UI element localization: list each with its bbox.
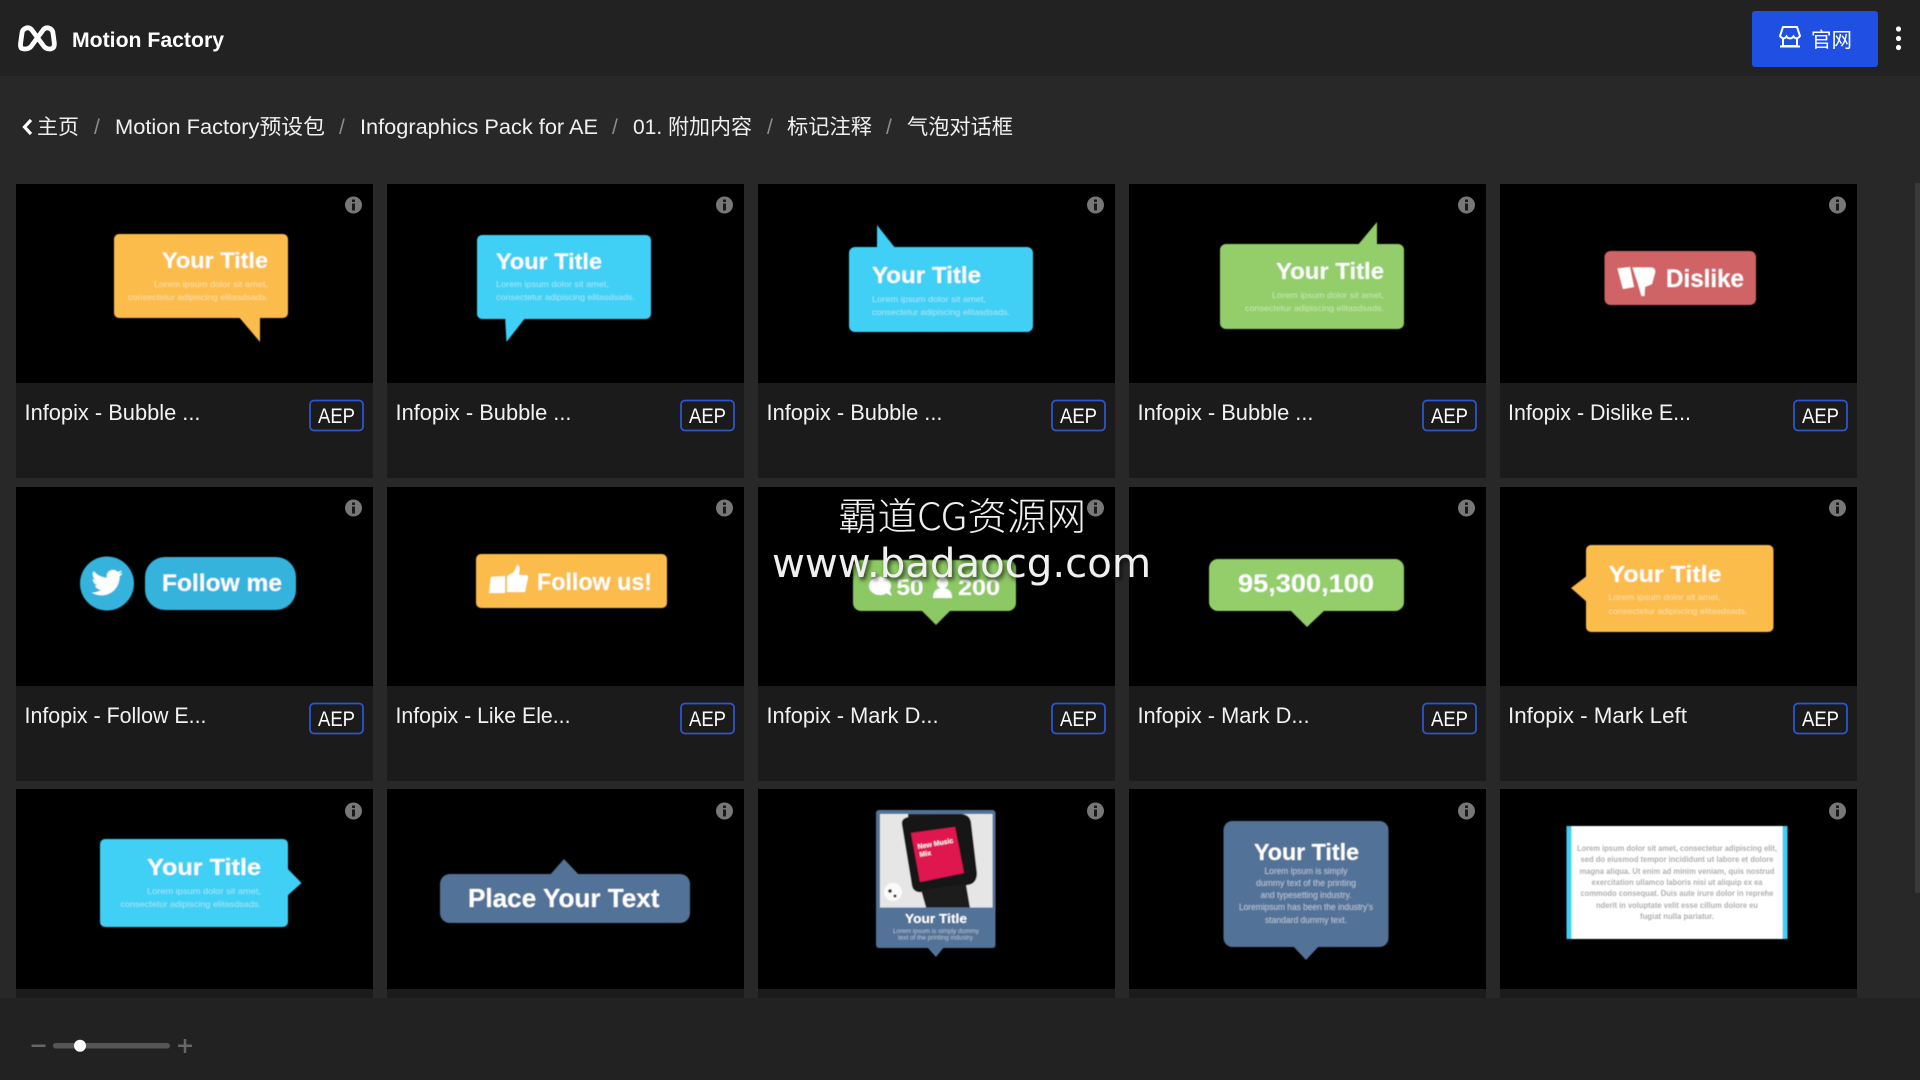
badge: AEP <box>1052 704 1105 734</box>
icon: thumb down <box>1618 267 1655 296</box>
bubble: slate text: Lorem ipsum is simply <box>1264 866 1348 877</box>
badge: AEP: AEP <box>318 708 355 731</box>
slider knob <box>74 1040 86 1052</box>
bubble: orange bottom right tail: Lorem ipsum dolor sit amet, <box>154 279 268 289</box>
badge: AEP: AEP <box>689 405 726 428</box>
breadcrumb: 主页 <box>37 116 79 139</box>
badge: AEP <box>1052 400 1105 430</box>
icon: thumb up <box>489 565 528 593</box>
bubble: cyan bottom left tail: consectetur adipiscing elitasdsads. <box>496 292 635 302</box>
bubble: slate text: dummy text of the printing <box>1256 878 1356 889</box>
bubble: slate photo <box>876 810 996 957</box>
scrollbar <box>1915 183 1920 893</box>
button: dislike <box>1604 251 1756 305</box>
badge: AEP: AEP <box>689 708 726 731</box>
icon: info <box>1458 802 1475 820</box>
bubble: green stats <box>853 560 1016 625</box>
badge: AEP: AEP <box>1060 405 1097 428</box>
card name: Infopix - Dislike E... <box>1508 400 1691 425</box>
badge: AEP <box>1794 400 1847 430</box>
card name: Infopix - Mark Left <box>1508 703 1687 728</box>
icon: more menu <box>1896 26 1901 50</box>
bubble: green top right tail: Lorem ipsum dolor sit amet, <box>1272 290 1384 300</box>
button: follow us: Follow us! <box>537 569 652 596</box>
icon: info <box>1829 196 1846 214</box>
slider track <box>53 1043 170 1048</box>
breadcrumb: / <box>767 116 773 139</box>
text box: white with cyan edges: Lorem ipsum dolor sit amet, consectetur adipiscing elit, <box>1577 844 1777 853</box>
icon: info <box>345 196 362 214</box>
panel: card photo callout <box>758 789 1115 998</box>
bubble: slate text: standard dummy text. <box>1265 915 1347 926</box>
icon: comment <box>869 577 892 596</box>
bubble: cyan right arrow <box>100 839 302 927</box>
icon: info <box>716 196 733 214</box>
breadcrumb: / <box>94 116 100 139</box>
bubble: green top right tail: consectetur adipiscing elitasdsads. <box>1245 303 1384 313</box>
image: smart watch: New Music <box>917 838 954 851</box>
bubble: cyan top left tail: Lorem ipsum dolor sit amet, <box>872 294 986 304</box>
card name: Infopix - Bubble ... <box>766 400 942 425</box>
bubble: slate photo: Lorem ipsum is simply dummy <box>893 928 980 935</box>
icon: minus <box>32 1044 46 1047</box>
icon: Motion Factory logo <box>20 28 54 49</box>
icon: store <box>1780 27 1800 46</box>
button: official site: 官网 <box>1811 29 1852 52</box>
breadcrumb: 标记注释 <box>787 116 872 139</box>
bubble: green top right tail <box>1220 222 1404 329</box>
panel: card Dislike <box>1500 184 1857 478</box>
panel: card Like <box>387 487 744 781</box>
badge: AEP <box>1423 704 1476 734</box>
bubble: slate top tail <box>440 859 690 923</box>
badge: AEP <box>310 400 363 430</box>
footer bar with zoom slider <box>0 998 1920 1080</box>
panel: card Mark Right <box>16 789 373 998</box>
icon: info <box>345 500 362 516</box>
badge: AEP: AEP <box>1802 708 1839 731</box>
bubble: cyan bottom left tail: Lorem ipsum dolor sit amet, <box>496 279 609 289</box>
bubble: slate text: and typesetting industry. <box>1260 890 1352 901</box>
bubble: orange left arrow: Your Title <box>1608 561 1722 587</box>
card name: Infopix - Follow E... <box>24 703 206 728</box>
icon: info <box>1458 196 1475 214</box>
panel: card Bubble green <box>1129 184 1486 478</box>
bubble: green top right tail: Your Title <box>1276 258 1384 284</box>
icon: info <box>1829 500 1846 516</box>
panel: card Mark D number <box>1129 487 1486 781</box>
text box: white with cyan edges: exercitation ullamco laboris nisi ut aliquip ex ea <box>1592 878 1763 887</box>
badge: AEP <box>310 704 363 734</box>
bubble: slate top tail: Place Your Text <box>468 883 660 913</box>
bubble: orange bottom right tail <box>114 234 288 342</box>
breadcrumb: / <box>339 116 345 139</box>
breadcrumb <box>24 116 1013 139</box>
text box: white with cyan edges: magna aliqua. Ut enim ad minim veniam, quis nostrud <box>1580 867 1775 876</box>
button: official site <box>1752 11 1878 67</box>
bubble: green stats: 50 <box>896 575 924 600</box>
breadcrumb: 01. 附加内容 <box>633 116 752 139</box>
text box: white with cyan edges: sed do eiusmod tempor incididunt ut labore et dolore <box>1580 855 1774 864</box>
panel: card Bubble orange <box>16 184 373 478</box>
card name: Infopix - Mark D... <box>1138 703 1310 728</box>
bubble: slate photo: text of the printing industry. <box>898 934 974 942</box>
icon: info <box>716 500 733 516</box>
watermark <box>772 486 1151 587</box>
panel: card Follow <box>16 487 373 781</box>
panel: card Mark Left <box>1500 487 1857 781</box>
bubble: slate text <box>1224 821 1388 960</box>
card name: Infopix - Mark D... <box>766 703 938 728</box>
icon: info <box>1087 500 1104 516</box>
bubble: cyan top left tail: Your Title <box>872 262 981 288</box>
text box: white with cyan edges: commodo consequat. Duis aute irure dolor in reprehe <box>1580 889 1774 898</box>
bubble: green stats: 200 <box>958 575 1000 600</box>
bubble: cyan top left tail <box>849 225 1033 332</box>
bubble: slate text: Your Title <box>1254 839 1359 865</box>
bubble: cyan right arrow: consectetur adipiscing elitasdsads. <box>120 899 261 909</box>
icon: plus <box>178 1039 192 1053</box>
panel: card Bubble cyan bottom <box>387 184 744 478</box>
panel: card slate text <box>1129 789 1486 998</box>
panel: card Place Your Text <box>387 789 744 998</box>
bubble: green number <box>1209 559 1404 627</box>
badge: AEP: AEP <box>1431 708 1468 731</box>
watermark: www.badaocg.com <box>772 541 1151 587</box>
card name: Infopix - Like Ele... <box>396 703 570 728</box>
text box: white with cyan edges <box>1566 826 1788 939</box>
bubble: cyan bottom left tail <box>477 235 651 342</box>
image: smart watch: Mix <box>919 850 932 859</box>
bubble: orange bottom right tail: consectetur adipiscing elitasdsads. <box>128 292 268 302</box>
badge: AEP: AEP <box>1060 708 1097 731</box>
bubble: orange left arrow <box>1571 545 1774 632</box>
breadcrumb: / <box>886 116 892 139</box>
text box: white with cyan edges: fugiat nulla pariatur. <box>1640 912 1714 921</box>
icon: info <box>345 802 362 820</box>
bubble: cyan right arrow: Your Title <box>147 854 261 880</box>
panel: card Mark D stats <box>758 487 1115 781</box>
bubble: cyan right arrow: Lorem ipsum dolor sit amet, <box>147 886 261 896</box>
card name: Infopix - Bubble ... <box>396 400 572 425</box>
watermark: 霸道CG资源网 <box>838 486 1086 541</box>
icon: info <box>1458 500 1475 516</box>
icon: info <box>716 802 733 820</box>
badge: AEP <box>1423 400 1476 430</box>
breadcrumb: Infographics Pack for AE <box>360 116 598 139</box>
bubble: cyan top left tail: consectetur adipiscing elitasdsads. <box>872 307 1010 317</box>
bubble: orange left arrow: Lorem ipsum dolor sit amet, <box>1608 592 1720 602</box>
panel: card white text box <box>1500 789 1857 998</box>
badge: AEP <box>681 400 734 430</box>
bubble: orange bottom right tail: Your Title <box>162 248 268 273</box>
button: twitter follow me: Follow me <box>162 570 282 597</box>
card name: Infopix - Bubble ... <box>24 400 200 425</box>
breadcrumb: Motion Factory预设包 <box>115 116 325 139</box>
brand name: Motion Factory <box>72 28 224 52</box>
card name: Infopix - Bubble ... <box>1138 400 1314 425</box>
badge: AEP: AEP <box>318 405 355 428</box>
button: dislike: Dislike <box>1666 265 1744 293</box>
badge: AEP <box>1794 704 1847 734</box>
badge: AEP <box>681 704 734 734</box>
icon: info <box>1087 802 1104 820</box>
icon: info <box>1829 802 1846 820</box>
button: follow us <box>476 554 667 608</box>
icon: person <box>933 578 952 598</box>
icon: twitter bird <box>92 570 123 595</box>
bubble: slate text: Loremipsum has been the industry's <box>1239 902 1373 913</box>
breadcrumb: / <box>612 116 618 139</box>
panel: card Bubble cyan top <box>758 184 1115 478</box>
badge: AEP: AEP <box>1431 405 1468 428</box>
text box: white with cyan edges: nderit in voluptate velit esse cillum dolore eu <box>1596 901 1758 910</box>
badge: AEP: AEP <box>1802 405 1839 428</box>
bubble: cyan bottom left tail: Your Title <box>496 249 602 274</box>
breadcrumb: 气泡对话框 <box>907 116 1013 139</box>
button: twitter follow me <box>80 556 296 610</box>
bubble: green number: 95,300,100 <box>1238 570 1374 598</box>
bubble: slate photo: Your Title <box>905 912 967 926</box>
icon: info <box>1087 196 1104 214</box>
bubble: orange left arrow: consectetur adipiscing elitasdsads. <box>1608 606 1748 616</box>
header bar <box>0 0 1920 76</box>
image: smart watch <box>880 814 992 908</box>
